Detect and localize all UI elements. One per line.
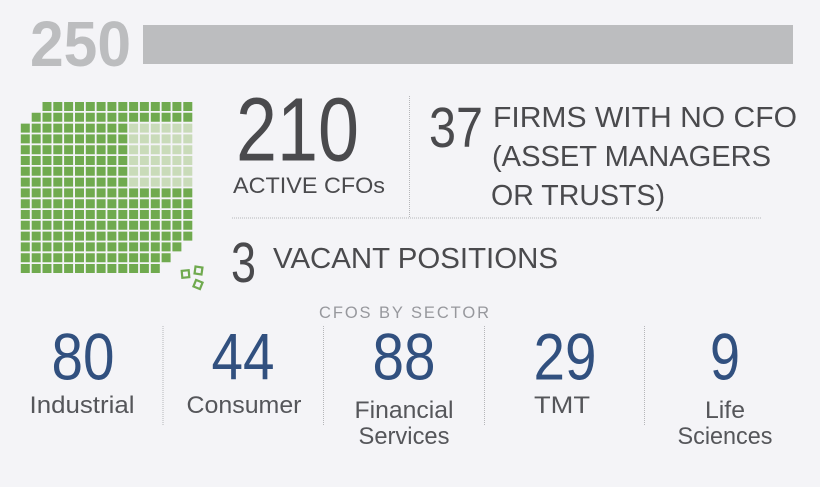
stat: 3 vacant positions: 3 bbox=[231, 231, 256, 295]
sector: Financial Services: Services bbox=[358, 423, 450, 450]
divider lines bbox=[163, 96, 762, 425]
sector: Life Sciences bbox=[678, 320, 772, 450]
stat: 37 firms with no CFO: (ASSET MANAGERS bbox=[492, 141, 771, 173]
stat: 37 firms with no CFO: FIRMS WITH NO CFO bbox=[493, 102, 797, 134]
stat: 37 firms with no CFO: 37 bbox=[429, 96, 483, 160]
stat: 3 vacant positions bbox=[231, 231, 558, 295]
sector: Industrial: Industrial bbox=[30, 392, 134, 419]
sub-heading: CFOs by sector: CFOS BY SECTOR bbox=[319, 304, 489, 322]
sector: Life Sciences: Life bbox=[705, 397, 745, 424]
sector: TMT bbox=[534, 320, 596, 419]
stat: 3 vacant positions: VACANT POSITIONS bbox=[273, 243, 558, 275]
stat: 210 active CFOs: 210 bbox=[236, 80, 359, 180]
stat: 37 firms with no CFO: OR TRUSTS) bbox=[491, 180, 665, 212]
sector: Consumer: Consumer bbox=[186, 392, 302, 419]
bar: total firms bbox=[143, 25, 793, 64]
sector: Consumer bbox=[186, 320, 302, 419]
sector: Financial Services: 88 bbox=[372, 320, 436, 394]
sector: Life Sciences: 9 bbox=[710, 320, 740, 394]
sector: TMT: TMT bbox=[534, 392, 590, 419]
sector: TMT: 29 bbox=[534, 320, 596, 394]
unit grid: firms bbox=[21, 102, 192, 273]
sector: Industrial: 80 bbox=[52, 320, 114, 394]
sector: Life Sciences: Sciences bbox=[678, 423, 772, 450]
icon: three vacant position squares bbox=[182, 267, 203, 289]
sector: Industrial bbox=[30, 320, 134, 419]
stat: 37 firms with no CFO bbox=[429, 96, 797, 212]
sector: Financial Services: Financial bbox=[354, 397, 454, 424]
stat: 210 active CFOs: ACTIVE CFOs bbox=[233, 173, 385, 198]
sector: Financial Services bbox=[354, 320, 454, 450]
total heading: 250: 250 bbox=[30, 8, 131, 80]
sector: Consumer: 44 bbox=[212, 320, 274, 394]
